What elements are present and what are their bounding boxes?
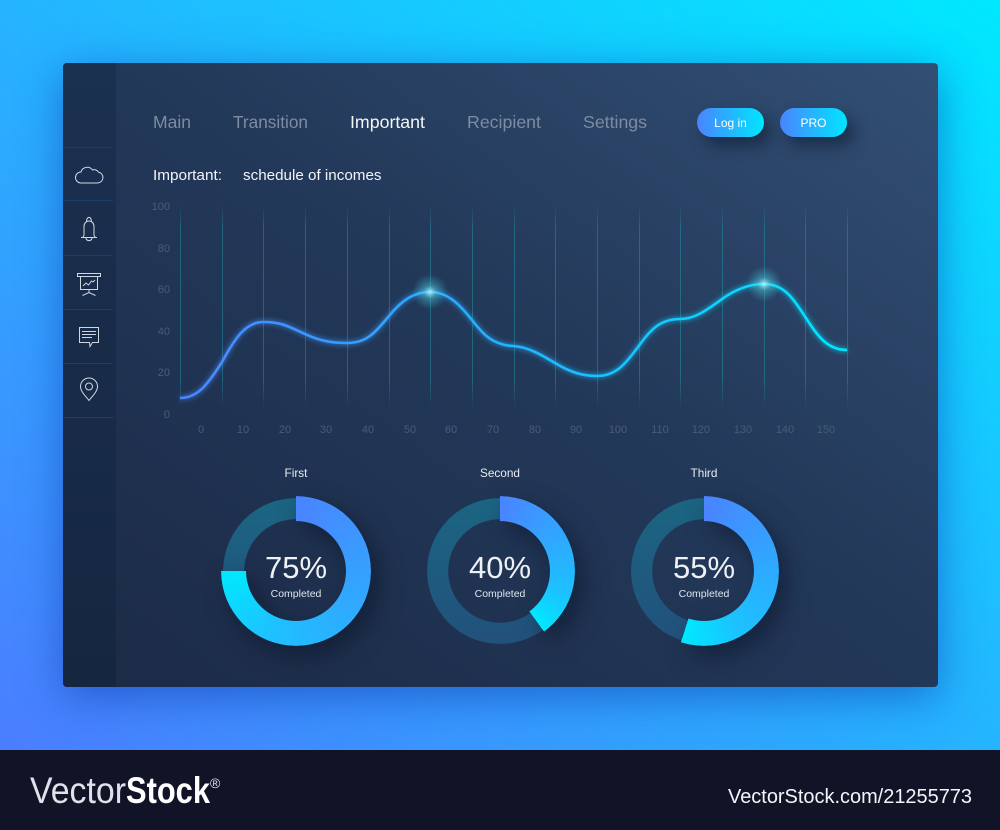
donut: third 55%	[631, 496, 794, 661]
x axis labels: 150	[817, 424, 835, 436]
x axis labels: 110	[651, 424, 669, 436]
x axis labels: 30	[320, 424, 332, 436]
donut: second 40%	[427, 496, 588, 644]
x axis labels: 90	[570, 424, 582, 436]
panel: dashboard	[63, 63, 938, 687]
x axis labels	[198, 424, 835, 436]
donut: first 75%: 75%	[265, 550, 327, 585]
x axis labels: 100	[609, 424, 627, 436]
donut: first 75%	[221, 496, 384, 659]
footer logo: ®	[210, 775, 221, 791]
donut: second 40%: 40%	[469, 550, 531, 585]
footer bar	[0, 750, 1000, 830]
chart glow: second peak	[746, 266, 782, 302]
y axis labels: 100	[152, 201, 170, 213]
panel: sidebar	[63, 63, 116, 687]
donut: second 40%: Completed	[475, 588, 525, 600]
button: log in: Log in	[714, 116, 747, 130]
icon: bell	[81, 217, 97, 241]
chart glow: first peak	[412, 274, 448, 310]
x axis labels: 40	[362, 424, 374, 436]
x axis labels: 20	[279, 424, 291, 436]
sidebar dividers	[64, 148, 113, 418]
y axis labels: 40	[158, 326, 170, 338]
footer logo: Stock	[126, 770, 210, 811]
button: log in	[697, 108, 764, 137]
navigation menu: Transition	[233, 112, 308, 132]
donut titles: Second	[480, 466, 520, 480]
donut titles	[285, 466, 717, 480]
donut: first 75%: Completed	[271, 588, 321, 600]
icon: cloud	[76, 167, 103, 183]
navigation menu	[153, 112, 647, 132]
x axis labels: 130	[734, 424, 752, 436]
x axis labels: 80	[529, 424, 541, 436]
x axis labels: 10	[237, 424, 249, 436]
y axis labels: 60	[158, 284, 170, 296]
line chart: incomes curve	[180, 284, 847, 398]
navigation menu: Main	[153, 112, 191, 132]
button: pro: PRO	[800, 116, 826, 130]
navigation menu: Recipient	[467, 112, 541, 132]
x axis labels: 50	[404, 424, 416, 436]
navigation menu: Important	[350, 112, 425, 132]
footer image id: VectorStock.com/21255773	[728, 786, 972, 808]
x axis labels: 70	[487, 424, 499, 436]
x axis labels: 60	[445, 424, 457, 436]
donut titles: First	[285, 466, 308, 480]
chart heading: schedule of incomes	[243, 167, 382, 184]
icon: presentation board	[78, 274, 100, 296]
button: pro	[780, 108, 847, 137]
icon: location pin	[80, 378, 98, 400]
navigation menu: Settings	[583, 112, 647, 132]
chart heading	[153, 167, 382, 184]
donut: third 55%: Completed	[679, 588, 729, 600]
donut: third 55%: 55%	[673, 550, 735, 585]
y axis labels	[152, 201, 170, 421]
donut titles: Third	[691, 466, 717, 480]
y axis labels: 20	[158, 367, 170, 379]
chart gridlines	[180, 205, 848, 409]
y axis labels: 80	[158, 243, 170, 255]
footer logo	[30, 770, 221, 811]
footer logo: Vector	[30, 770, 126, 811]
chart heading: Important:	[153, 167, 222, 184]
x axis labels: 0	[198, 424, 204, 436]
y axis labels: 0	[164, 409, 170, 421]
icon: chat bubble	[80, 328, 98, 346]
x axis labels: 120	[692, 424, 710, 436]
x axis labels: 140	[776, 424, 794, 436]
